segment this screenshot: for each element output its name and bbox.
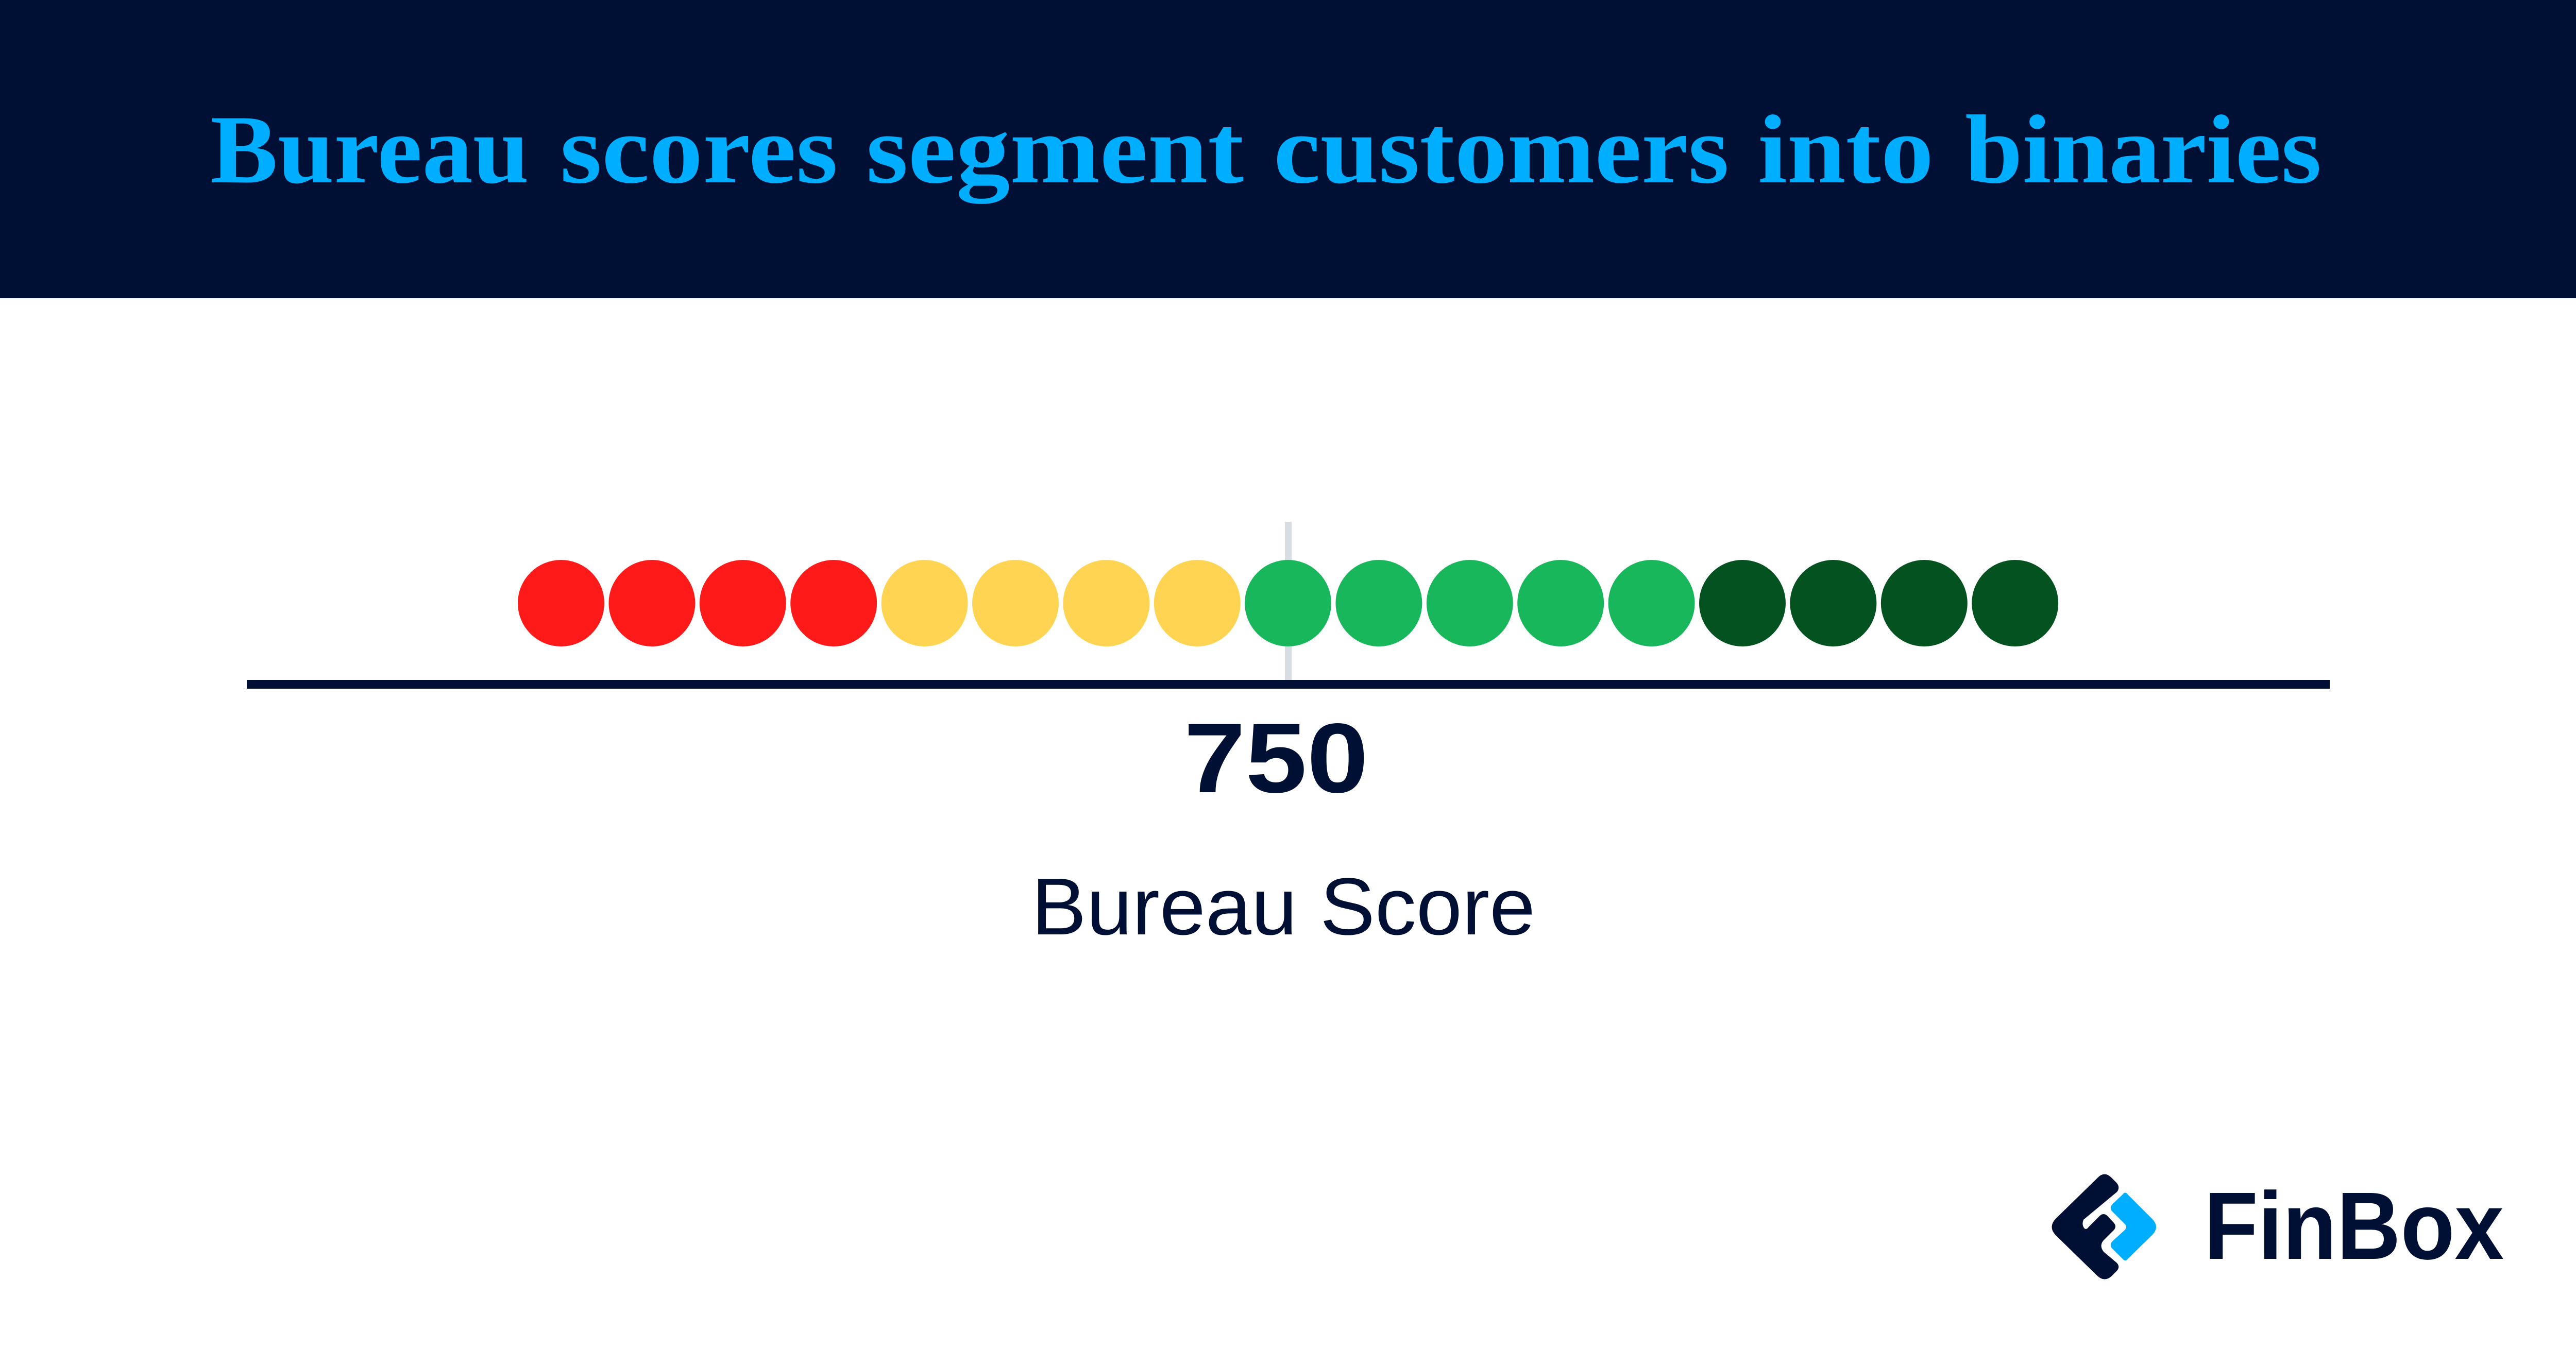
score value: 750 <box>1184 703 1368 813</box>
title: customers <box>1274 96 1729 204</box>
title: scores <box>560 96 838 204</box>
dark green dots: high scores <box>1699 560 2058 646</box>
icon: FinBox mark <box>2052 1174 2156 1279</box>
title: Bureau <box>210 96 529 204</box>
green dots: above-threshold scores <box>1245 560 1695 646</box>
yellow dots: below-threshold scores <box>882 560 1241 646</box>
title: into <box>1758 96 1934 204</box>
red dots: low scores <box>518 560 877 646</box>
FinBox logo <box>2052 1173 2504 1279</box>
header band <box>0 0 2576 298</box>
logo wordmark: FinBox <box>2204 1173 2504 1279</box>
score threshold marker <box>1285 522 1292 681</box>
title: segment <box>866 96 1244 204</box>
title: binaries <box>1965 96 2321 204</box>
axis line <box>247 680 2330 689</box>
dot scale <box>518 560 2058 646</box>
axis caption: Bureau Score <box>1031 862 1535 952</box>
